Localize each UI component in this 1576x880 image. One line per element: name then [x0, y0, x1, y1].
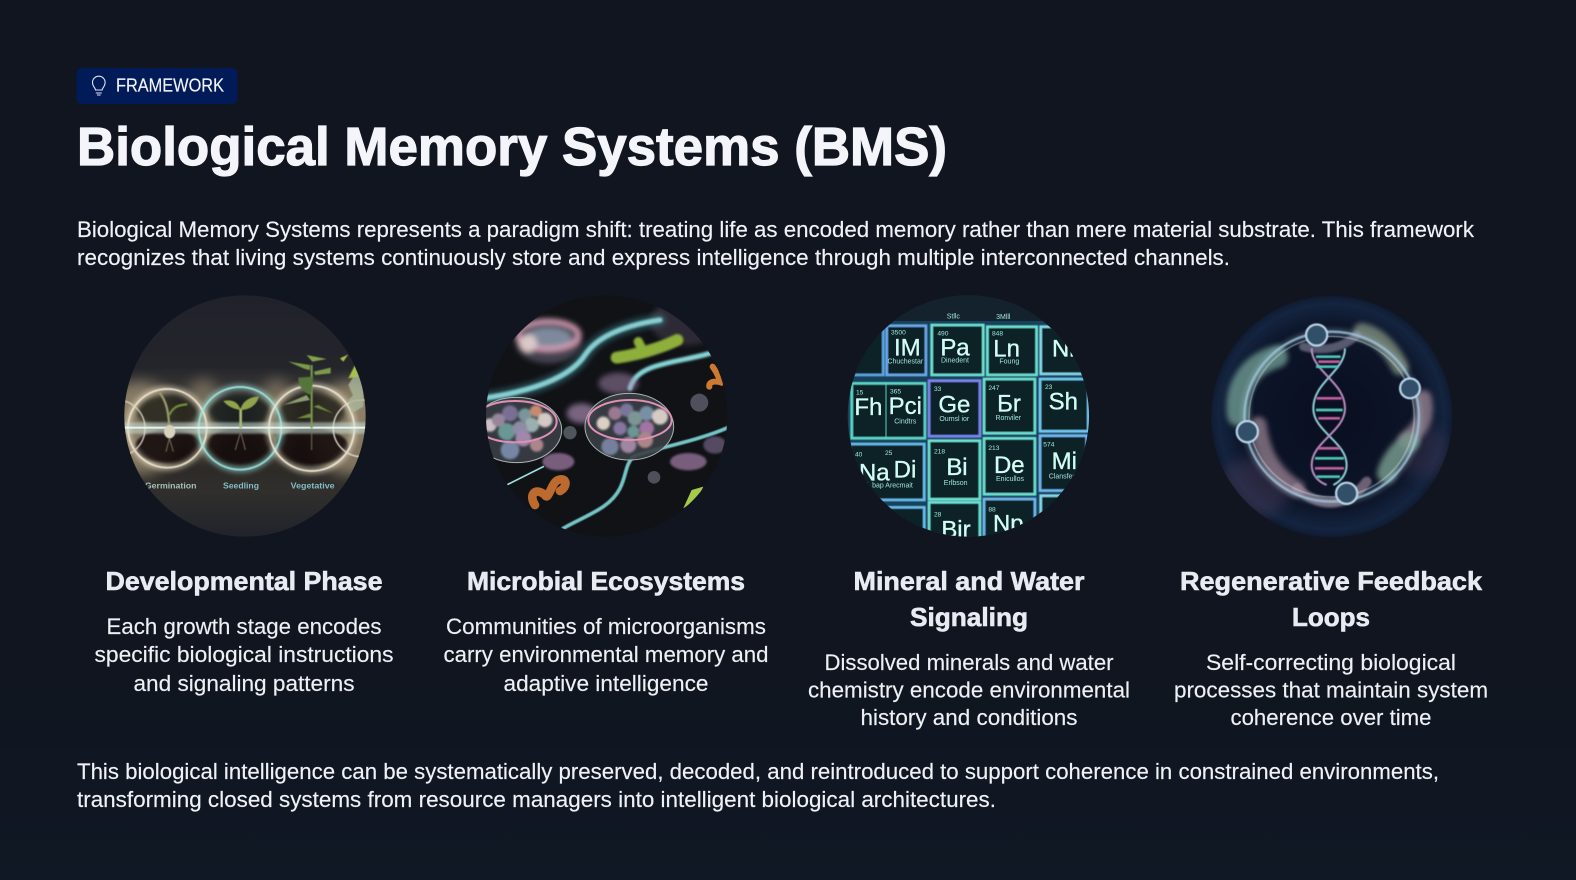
heading: Signaling: [910, 602, 1028, 632]
description: Self-correcting biological: [1206, 650, 1456, 675]
intro paragraph: [77, 217, 1475, 270]
image: periodic table tiles: 574: [1043, 442, 1055, 449]
image: periodic table tiles: 23: [1045, 384, 1053, 391]
description: [1174, 650, 1488, 730]
description: carry environmental memory and: [444, 642, 768, 667]
image: periodic table tiles: Fh: [854, 394, 882, 421]
description: processes that maintain system: [1174, 678, 1488, 702]
image: periodic table tiles: De: [994, 452, 1025, 479]
panel: developmental phase: [88, 292, 393, 696]
closing paragraph: This biological intelligence can be systematically preserved, decoded, and reintroduced to support coherence in constrained environments,: [77, 759, 1439, 784]
image: plant growth stages: Germination: [145, 480, 196, 490]
image: microbes: [472, 293, 730, 540]
icon: lightbulb: [92, 76, 105, 95]
closing paragraph: transforming closed systems from resource managers into intelligent biological architectures.: [77, 787, 996, 812]
badge label: FRAMEWORK: [116, 76, 224, 96]
intro paragraph: Biological Memory Systems represents a paradigm shift: treating life as encoded memory rather than mere material substrate. This framework: [77, 217, 1475, 242]
image: periodic table tiles: rid, bap Arecmait: [860, 483, 913, 490]
image: periodic table tiles: Mi: [1052, 448, 1077, 475]
image: periodic table tiles: Pa: [940, 335, 970, 362]
image: periodic table tiles: Бr: [997, 391, 1021, 418]
image: periodic table tiles: Ge: [938, 391, 970, 418]
image: periodic table tiles: 33: [934, 386, 942, 393]
image: plant growth stages: Vegetative: [291, 480, 335, 490]
image: plant growth stages: [124, 296, 366, 536]
image: periodic table tiles: Ronviler: [996, 415, 1022, 422]
image: periodic table tiles: 490: [937, 331, 949, 338]
description: chemistry encode environmental: [808, 678, 1130, 702]
image: periodic table tiles: 3500: [891, 329, 906, 336]
description: and signaling patterns: [134, 671, 354, 696]
panel: mineral and water signaling: [808, 295, 1130, 730]
image: periodic table tiles: 213: [988, 445, 1000, 452]
description: Communities of microorganisms: [446, 614, 766, 639]
panel: microbial ecosystems: [444, 293, 768, 696]
image: periodic table tiles: 218: [934, 448, 945, 455]
heading: [1180, 566, 1483, 632]
description: adaptive intelligence: [504, 671, 708, 696]
image: periodic table tiles: Bi: [946, 454, 968, 481]
image: periodic table tiles: [847, 295, 1090, 543]
image: periodic table tiles: Erlbson: [944, 480, 968, 487]
image: periodic table tiles: Enicullos: [996, 476, 1024, 483]
image: periodic table tiles: Sh: [1049, 389, 1078, 416]
panel: regenerative feedback loops: [1174, 295, 1488, 730]
description: specific biological instructions: [94, 642, 394, 667]
image: periodic table tiles: Cindtrs: [894, 418, 917, 425]
image: periodic table tiles: 848: [992, 331, 1003, 338]
description: history and conditions: [860, 705, 1078, 730]
intro paragraph: recognizes that living systems continuously store and express intelligence through multiple interconnected channels.: [77, 245, 1230, 270]
image: periodic table tiles: 28: [934, 512, 942, 519]
image: periodic table tiles: Na: [859, 460, 890, 487]
description: coherence over time: [1230, 705, 1432, 730]
closing paragraph: [77, 759, 1439, 812]
image: periodic table tiles: Foung: [999, 358, 1019, 365]
image: periodic table tiles: 25: [885, 450, 893, 457]
image: periodic table tiles: Np: [993, 511, 1024, 538]
image: periodic table tiles: 40: [855, 452, 863, 459]
image: periodic table tiles: Pci: [889, 393, 922, 420]
image: periodic table tiles: Oumsl ior: [939, 416, 970, 423]
image: periodic table tiles: 247: [988, 385, 1000, 392]
image: periodic table tiles: Bir: [941, 516, 971, 543]
image: periodic table tiles: Ln: [993, 335, 1020, 362]
description: Dissolved minerals and water: [824, 650, 1114, 675]
image: plant growth stages: Seedling: [223, 480, 259, 490]
image: periodic table tiles: Chuchestar: [887, 358, 924, 365]
description: [444, 614, 768, 696]
heading: Microbial Ecosystems: [467, 566, 745, 596]
heading: Developmental Phase: [106, 566, 383, 596]
heading: Mineral and Water: [854, 566, 1084, 596]
heading: [854, 566, 1084, 632]
description: Each growth stage encodes: [106, 614, 382, 639]
badge: framework: [76, 68, 238, 104]
image: periodic table tiles: 15: [856, 389, 864, 396]
image: periodic table tiles: IM: [894, 335, 921, 362]
image: periodic table tiles: Stllc: [947, 313, 960, 320]
image: periodic table tiles: 365: [890, 388, 901, 395]
heading: Loops: [1292, 602, 1370, 632]
image: periodic table tiles: Clansfest: [1049, 473, 1078, 480]
image: periodic table tiles: Dinedent: [941, 357, 969, 364]
description: [808, 650, 1130, 730]
image: periodic table tiles: 88: [988, 507, 996, 514]
description: [94, 614, 394, 696]
image: periodic table tiles: 3Mlll: [996, 314, 1011, 321]
heading: Regenerative Feedback: [1180, 566, 1483, 596]
image: periodic table tiles: Ni: [1052, 335, 1075, 362]
image: periodic table tiles: Di: [894, 456, 916, 483]
title: Biological Memory Systems (BMS): [77, 117, 947, 177]
image: dna in regenerative ring: [1210, 295, 1453, 538]
